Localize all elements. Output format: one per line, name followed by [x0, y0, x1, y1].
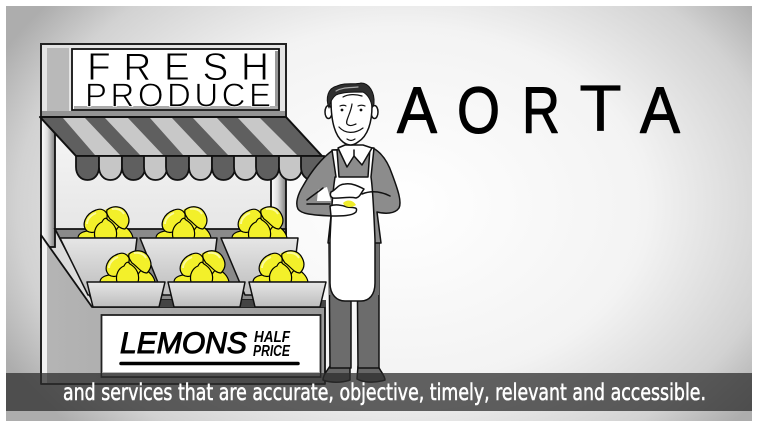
counter side panel: [41, 235, 326, 384]
stall posts: [41, 117, 286, 247]
shelf: [55, 229, 286, 300]
sweater: [297, 148, 400, 243]
word: AORTA: O: [457, 73, 500, 147]
word: AORTA: A: [397, 73, 437, 147]
shoes: [323, 366, 385, 382]
word: AORTA: A: [640, 73, 680, 147]
collar: [338, 145, 372, 167]
apron: [330, 148, 375, 301]
word: AORTA: [397, 71, 680, 147]
hair: [327, 83, 374, 108]
word: AORTA: R: [522, 73, 560, 147]
word: AORTA: T: [579, 71, 622, 145]
upper lemons: [78, 207, 287, 238]
caption bar: [6, 373, 752, 411]
sign: lemons half price: LEMONS: [120, 327, 247, 360]
trousers: [329, 240, 379, 368]
sign: lemons half price: PRICE: [253, 343, 291, 360]
sign: fresh produce: PRODUCE: [85, 76, 271, 114]
upper bowls: [60, 238, 298, 295]
head: [325, 83, 378, 145]
stall header board: [41, 44, 286, 117]
face features: [339, 95, 365, 140]
lower bowls: [87, 282, 326, 307]
sign: fresh produce: [72, 46, 279, 114]
sign: lemons half price: [102, 315, 320, 377]
shopkeeper: [297, 83, 400, 382]
produce stall: [40, 44, 326, 384]
stall back wall: [55, 117, 272, 230]
lemon in hand: [343, 201, 356, 207]
sign: fresh produce: FRESH: [87, 46, 269, 89]
arm lines: [307, 187, 390, 204]
sign: lemons half price: HALF: [254, 329, 291, 346]
lower lemons: [100, 251, 308, 282]
hands: [330, 184, 364, 216]
awning: [40, 117, 322, 156]
awning scallops: [76, 156, 324, 180]
